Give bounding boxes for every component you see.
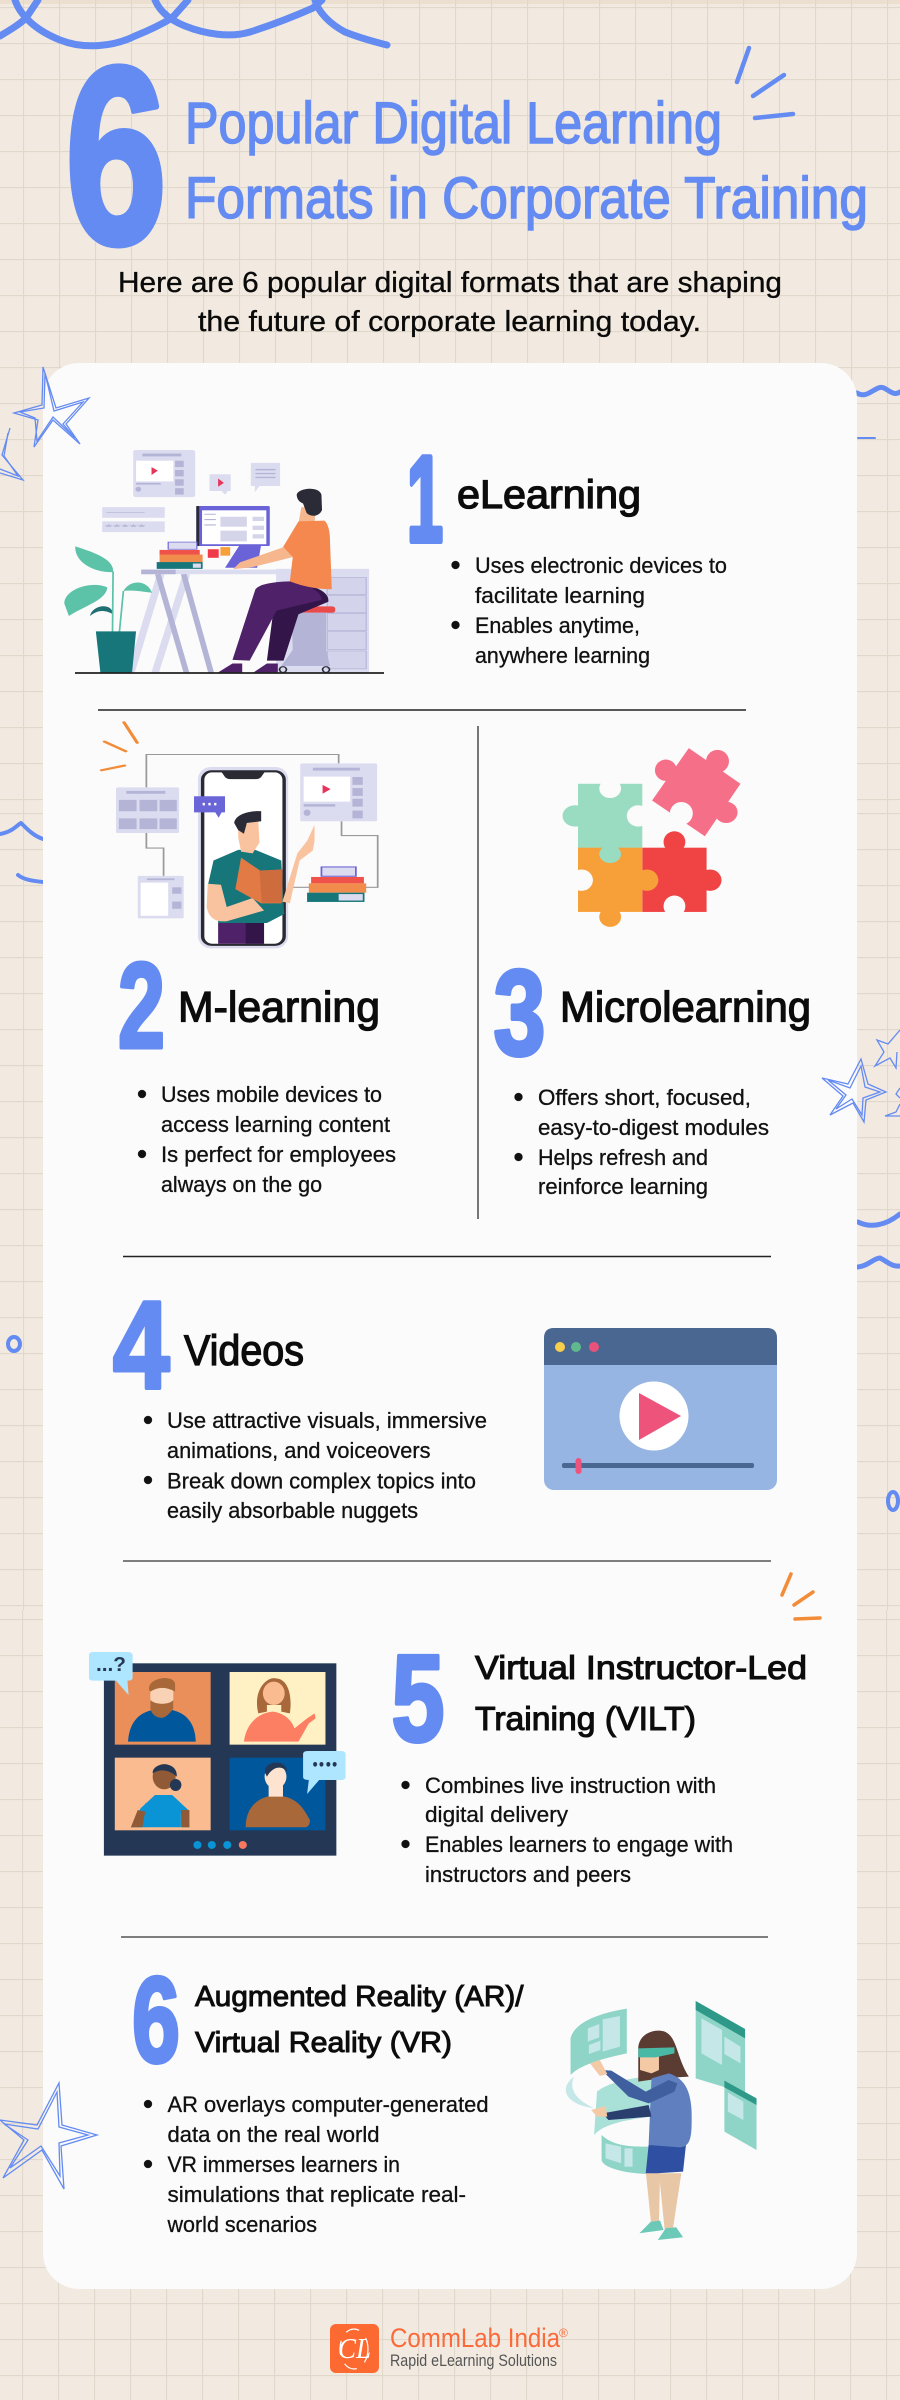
decoration: orange sparks (782, 1574, 820, 1619)
logo: CommLab India (330, 2323, 568, 2373)
section 5: heading: Virtual Instructor-Led (475, 1649, 807, 1686)
section 2: numeral 2: 2 (118, 938, 165, 1074)
section 5: bullets: Combines live instruction with (425, 1773, 716, 1798)
section 4: heading: Videos (184, 1327, 304, 1375)
bubbles and inputs (102, 463, 280, 532)
logo tagline: Rapid eLearning Solutions (390, 2351, 557, 2370)
section 1: ground line (75, 672, 384, 674)
red piece (642, 831, 722, 912)
title: big numeral 6: 6 (65, 14, 167, 297)
section 4: bullets: Use attractive visuals, immersive (167, 1408, 487, 1433)
subtitle (118, 267, 782, 338)
decoration: side squiggles and circles (0, 387, 900, 1510)
control dots (193, 1841, 247, 1849)
section 3: bullets (514, 1085, 769, 1199)
section 6: bullets (144, 2092, 488, 2237)
section 5: virtual classroom illustration (89, 1652, 346, 1856)
section 6: bullets: AR overlays computer-generated (168, 2092, 488, 2117)
section 5: bullets: Enables learners to engage with (425, 1832, 733, 1857)
section 2: bullets: always on the go (161, 1172, 322, 1197)
section 2: phone illustration (102, 722, 378, 948)
section 6: heading (195, 1981, 524, 2059)
section 4: bullets: easily absorbable nuggets (167, 1498, 418, 1523)
section 5: bullets (402, 1773, 733, 1887)
section 5: bullets: digital delivery (425, 1802, 568, 1827)
section 3: numeral 3: 3 (494, 944, 546, 1080)
section 5: heading (475, 1649, 807, 1737)
section 4: bullets (144, 1408, 487, 1523)
bubble text: ...? (96, 1654, 126, 1676)
section 1: bullets (452, 553, 727, 668)
section 6: AR/VR illustration (566, 2001, 757, 2240)
section 3: bullets: easy-to-digest modules (538, 1115, 769, 1140)
section 6: numeral 6: 6 (132, 1952, 180, 2088)
plant (64, 546, 152, 673)
section 1: bullets: Enables anytime, (475, 613, 640, 638)
cabinet and desk (131, 569, 369, 673)
books (157, 542, 203, 569)
decoration: scalloped scribble at top (0, 0, 387, 46)
subtitle: Here are 6 popular digital formats that are shaping (118, 267, 782, 299)
logo mark: CL (338, 2334, 371, 2365)
section 1: bullets: facilitate learning (475, 583, 645, 608)
section 1: bullets: anywhere learning (475, 643, 650, 668)
section 1: eLearning illustration (64, 450, 369, 673)
card: document (138, 876, 184, 918)
floating right panels (696, 2001, 757, 2150)
participant: woman in blue (115, 1758, 211, 1830)
orange piece (570, 845, 658, 927)
card: grid (116, 787, 179, 833)
title: heading text: Popular Digital Learning (185, 91, 722, 156)
participant: man in brown (230, 1758, 325, 1830)
section 3: bullets: reinforce learning (538, 1174, 708, 1199)
curved screens (566, 2009, 651, 2174)
participant: bearded man (115, 1672, 211, 1745)
panel: main white card (43, 363, 857, 2289)
books (307, 867, 366, 902)
section 3: heading: Microlearning (560, 984, 811, 1032)
section 4: video player icon (544, 1328, 777, 1490)
participant: woman (230, 1672, 325, 1745)
icon: title sparkle strokes (737, 48, 793, 118)
section 3: bullets: Offers short, focused, (538, 1085, 751, 1110)
section 6: bullets: world scenarios (167, 2212, 317, 2237)
title: heading text (185, 91, 868, 231)
person (217, 489, 335, 673)
decoration: outline stars top-left (0, 367, 89, 480)
section 2: bullets: Uses mobile devices to (161, 1082, 382, 1107)
registered mark: ® (559, 2326, 568, 2340)
bubbles and inputs: ***** (104, 524, 146, 532)
section 5: bullets: instructors and peers (425, 1862, 631, 1887)
section 4: bullets: animations, and voiceovers (167, 1438, 430, 1463)
section 4: numeral 4: 4 (113, 1277, 170, 1415)
pink piece (652, 748, 740, 836)
phone (198, 767, 288, 948)
section 3: puzzle illustration (563, 748, 740, 927)
decoration: outline stars right (822, 1030, 900, 1122)
logo mark (330, 2324, 379, 2373)
section 2: heading: M-learning (178, 984, 380, 1032)
monitor (196, 506, 270, 568)
orange sparks (102, 722, 137, 770)
logo wordmark: CommLab India (390, 2323, 561, 2353)
section 4: bullets: Break down complex topics into (167, 1468, 476, 1494)
section 2: bullets: Is perfect for employees (161, 1142, 396, 1167)
section 6: heading: Augmented Reality (AR)/ (195, 1981, 524, 2013)
speech bubble: question (89, 1652, 133, 1695)
woman (590, 2031, 692, 2240)
section 5: numeral 5: 5 (392, 1631, 444, 1768)
green piece (563, 779, 650, 848)
man with book (207, 811, 315, 944)
section 6: heading: Virtual Reality (VR) (195, 2027, 452, 2059)
subtitle: the future of corporate learning today. (198, 306, 701, 338)
section 6: bullets: simulations that replicate real- (168, 2182, 466, 2207)
card: video (300, 763, 377, 821)
section 1: bullets: Uses electronic devices to (475, 553, 727, 578)
speech bubble: dots (303, 1751, 346, 1794)
section 3: bullets: Helps refresh and (538, 1145, 708, 1170)
floating screen (133, 450, 195, 497)
section 2: bullets (138, 1082, 396, 1197)
section 2: bullets: access learning content (161, 1112, 390, 1137)
decoration: outline star bottom-left (0, 2083, 97, 2189)
section 1: numeral 1: 1 (407, 431, 443, 567)
chat bubble (194, 796, 225, 818)
section 6: bullets: data on the real world (168, 2122, 380, 2147)
section 6: bullets: VR immerses learners in (168, 2152, 400, 2177)
section 1: heading: eLearning (457, 473, 641, 517)
section 5: heading: Training (VILT) (475, 1700, 696, 1737)
